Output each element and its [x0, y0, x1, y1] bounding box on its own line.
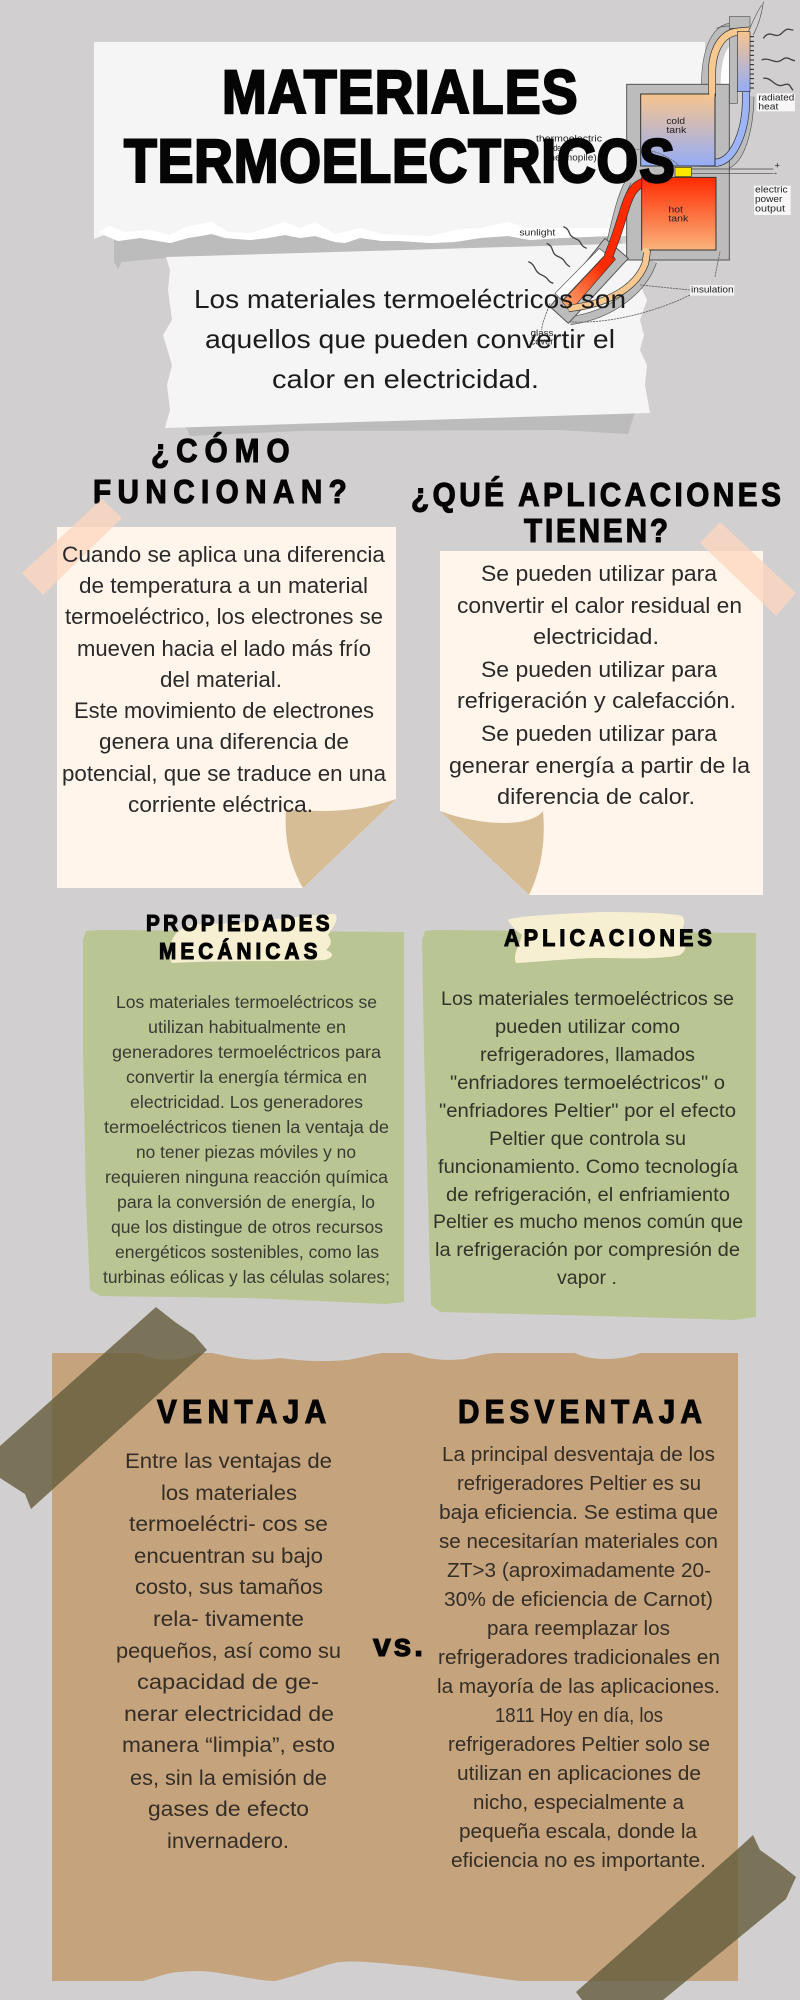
text: que aplicaciones: Se pueden utilizar para: [481, 721, 718, 746]
text: como funcionan: termoeléctrico, los electrones se: [65, 604, 383, 629]
text: como funcionan: potencial, que se traduce en una: [62, 761, 387, 786]
tape: top-left olive: [0, 1307, 207, 1509]
panel: como funcionan note: [22, 432, 396, 888]
intro text: calor en electricidad.: [272, 364, 539, 394]
intro paper shadow: [185, 412, 635, 436]
heading: como funcionan: FUNCIONAN?: [93, 474, 347, 510]
text: que aplicaciones: convertir el calor residual en: [457, 593, 742, 618]
page curl: left: [286, 799, 396, 888]
label: thermoelectric device: (thermopile): [543, 152, 597, 162]
title paper shadow: [114, 232, 625, 269]
heading: desventaja: DESVENTAJA: [458, 1394, 702, 1430]
text: propiedades mecanicas: [103, 992, 390, 1287]
text: desventaja: eficiencia no es importante.: [451, 1850, 706, 1872]
panel: intro paper: [163, 243, 650, 428]
text: propiedades mecanicas: turbinas eólicas y las células solares;: [103, 1267, 390, 1287]
tape: left peach: [22, 499, 122, 595]
label: thermoelectric device: device: [553, 143, 573, 153]
text: que aplicaciones: Se pueden utilizar para: [481, 561, 718, 586]
label: glass cover: cover: [531, 337, 553, 347]
text: que aplicaciones: electricidad.: [533, 624, 659, 649]
panel: aplicaciones: [422, 912, 756, 1320]
text: aplicaciones: Peltier es mucho menos común que: [433, 1211, 743, 1233]
label: radiated heat: heat: [758, 102, 779, 112]
label: radiated heat: radiated: [758, 93, 794, 103]
text: como funcionan: de temperatura a un material: [79, 573, 368, 598]
heading: como funcionan: [93, 432, 347, 510]
tape: bottom-right olive: [576, 1835, 796, 2000]
heading: aplicaciones: APLICACIONES: [504, 924, 712, 951]
brush highlight: right: [508, 912, 685, 963]
label: plus and minus: [774, 161, 780, 178]
label: radiated heat: [757, 93, 795, 112]
text: que aplicaciones: generar energía a partir de la: [449, 753, 751, 778]
text: aplicaciones: de refrigeración, el enfriamiento: [446, 1184, 730, 1206]
text: aplicaciones: Los materiales termoeléctricos se: [441, 988, 734, 1010]
text: que aplicaciones: refrigeración y calefacción.: [457, 688, 736, 713]
text: ventaja: capacidad de ge-: [137, 1670, 319, 1694]
intro text: [194, 284, 626, 394]
heading: que aplicaciones: TIENEN?: [524, 513, 668, 549]
title: [124, 59, 675, 196]
label: electric power output: power: [755, 194, 782, 204]
panel: que aplicaciones note: [411, 477, 796, 895]
text: como funcionan: mueven hacia el lado más frío: [77, 636, 371, 661]
vs label: vs.: [373, 1627, 423, 1663]
text: ventaja: rela- tivamente: [153, 1607, 304, 1631]
label: hot tank: hot: [668, 204, 684, 214]
heading: que aplicaciones: [411, 477, 781, 549]
label: cold tank: tank: [666, 125, 687, 135]
text: propiedades mecanicas: utilizan habitualmente en: [148, 1017, 346, 1037]
tape: right peach: [700, 522, 796, 616]
text: aplicaciones: vapor .: [557, 1267, 617, 1289]
label: glass cover: glass: [531, 328, 554, 338]
text: aplicaciones: "enfriadores termoeléctricos" o: [450, 1072, 725, 1094]
text: propiedades mecanicas: energéticos sostenibles, como las: [115, 1242, 379, 1262]
text: ventaja: es, sin la emisión de: [130, 1766, 327, 1790]
panel: ventaja vs desventaja: [52, 1353, 738, 1981]
text: desventaja: para reemplazar los: [487, 1618, 670, 1640]
label: hot tank: tank: [668, 213, 689, 223]
title: MATERIALES: [222, 59, 578, 127]
text: desventaja: [437, 1444, 720, 1872]
text: desventaja: refrigeradores tradicionales en: [438, 1647, 720, 1669]
text: ventaja: Entre las ventajas de: [125, 1449, 332, 1473]
label: cold tank: cold: [666, 116, 685, 126]
text: como funcionan: corriente eléctrica.: [128, 792, 313, 817]
text: propiedades mecanicas: que los distingue de otros recursos: [111, 1217, 383, 1237]
heading: que aplicaciones: ¿QUÉ APLICACIONES: [411, 477, 781, 513]
text: propiedades mecanicas: electricidad. Los generadores: [130, 1092, 363, 1112]
heading: propiedades mecanicas: PROPIEDADES: [146, 910, 330, 936]
text: aplicaciones: la refrigeración por compresión de: [435, 1239, 740, 1261]
label: thermoelectric device: [536, 134, 603, 162]
text: que aplicaciones: [449, 561, 751, 809]
brush highlight: left: [170, 914, 337, 963]
text: aplicaciones: Peltier que controla su: [489, 1128, 686, 1150]
text: desventaja: refrigeradores Peltier solo se: [448, 1734, 710, 1756]
text: ventaja: encuentran su bajo: [134, 1544, 323, 1568]
panel: title paper: [94, 42, 705, 243]
text: ventaja: nerar electricidad de: [124, 1702, 334, 1726]
text: desventaja: nicho, especialmente a: [473, 1792, 685, 1814]
text: ventaja: [116, 1449, 341, 1853]
text: propiedades mecanicas: para la conversión de energía, lo: [117, 1192, 375, 1212]
heading: propiedades mecanicas: [146, 910, 330, 964]
text: desventaja: baja eficiencia. Se estima que: [439, 1502, 718, 1524]
text: ventaja: termoeléctri- cos se: [129, 1512, 328, 1536]
label: glass cover: [531, 328, 554, 347]
label: thermoelectric device: thermoelectric: [536, 134, 603, 144]
text: propiedades mecanicas: requieren ninguna reacción química: [105, 1167, 388, 1187]
intro text: aquellos que pueden convertir el: [205, 324, 615, 354]
text: como funcionan: del material.: [160, 667, 282, 692]
text: aplicaciones: "enfriadores Peltier" por el efecto: [439, 1100, 736, 1122]
white torn fringe: [98, 222, 610, 243]
text: desventaja: La principal desventaja de los: [442, 1444, 715, 1466]
text: ventaja: gases de efecto: [148, 1797, 309, 1821]
text: ventaja: los materiales: [161, 1481, 297, 1505]
text: aplicaciones: refrigeradores, llamados: [480, 1044, 695, 1066]
label: electric power output: output: [755, 203, 786, 213]
text: ventaja: pequeños, así como su: [116, 1639, 341, 1663]
text: como funcionan: Este movimiento de electrones: [74, 698, 374, 723]
label: electric power output: [754, 185, 791, 215]
text: como funcionan: genera una diferencia de: [99, 729, 349, 754]
label: hot tank: [668, 204, 689, 223]
label: plus and minus: +: [775, 161, 780, 171]
text: desventaja: 1811 Hoy en día, los: [495, 1705, 663, 1727]
title: TERMOELECTRICOS: [124, 128, 675, 196]
text: desventaja: la mayoría de las aplicaciones.: [437, 1676, 720, 1698]
text: ventaja: costo, sus tamaños: [135, 1575, 323, 1599]
text: desventaja: pequeña escala, donde la: [459, 1821, 698, 1843]
icon: thermoelectric generator diagram: [519, 2, 795, 347]
text: desventaja: refrigeradores Peltier es su: [457, 1473, 701, 1495]
page curl: right: [440, 811, 544, 895]
heading: como funcionan: ¿CÓMO: [151, 432, 290, 469]
text: que aplicaciones: diferencia de calor.: [497, 784, 695, 809]
text: desventaja: utilizan en aplicaciones de: [457, 1763, 701, 1785]
intro text: Los materiales termoeléctricos son: [194, 284, 626, 314]
panel: propiedades mecanicas: [83, 910, 404, 1304]
text: ventaja: manera “limpia”, esto: [122, 1733, 335, 1757]
text: desventaja: 30% de eficiencia de Carnot): [444, 1589, 713, 1611]
label: plus and minus: -: [774, 168, 777, 178]
text: propiedades mecanicas: termoeléctricos tienen la ventaja de: [104, 1117, 389, 1137]
label: cold tank: [666, 116, 687, 135]
text: propiedades mecanicas: convertir la energía térmica en: [126, 1067, 367, 1087]
heading: ventaja: VENTAJA: [157, 1394, 326, 1430]
text: que aplicaciones: Se pueden utilizar para: [481, 657, 718, 682]
text: propiedades mecanicas: no tener piezas móviles y no: [136, 1142, 356, 1162]
text: desventaja: ZT>3 (aproximadamente 20-: [447, 1560, 711, 1582]
text: como funcionan: [62, 542, 387, 817]
text: como funcionan: Cuando se aplica una diferencia: [62, 542, 386, 567]
text: aplicaciones: funcionamiento. Como tecnología: [438, 1156, 738, 1178]
text: ventaja: invernadero.: [167, 1829, 289, 1853]
text: propiedades mecanicas: generadores termoeléctricos para: [112, 1042, 381, 1062]
text: aplicaciones: [433, 988, 743, 1289]
text: aplicaciones: pueden utilizar como: [495, 1016, 680, 1038]
heading: propiedades mecanicas: MECÁNICAS: [159, 938, 317, 964]
label: insulation: insulation: [691, 285, 734, 295]
text: propiedades mecanicas: Los materiales termoeléctricos se: [116, 992, 377, 1012]
label: electric power output: electric: [755, 185, 788, 195]
label: sunlight: sunlight: [519, 228, 556, 238]
text: desventaja: se necesitarían materiales con: [439, 1531, 718, 1553]
